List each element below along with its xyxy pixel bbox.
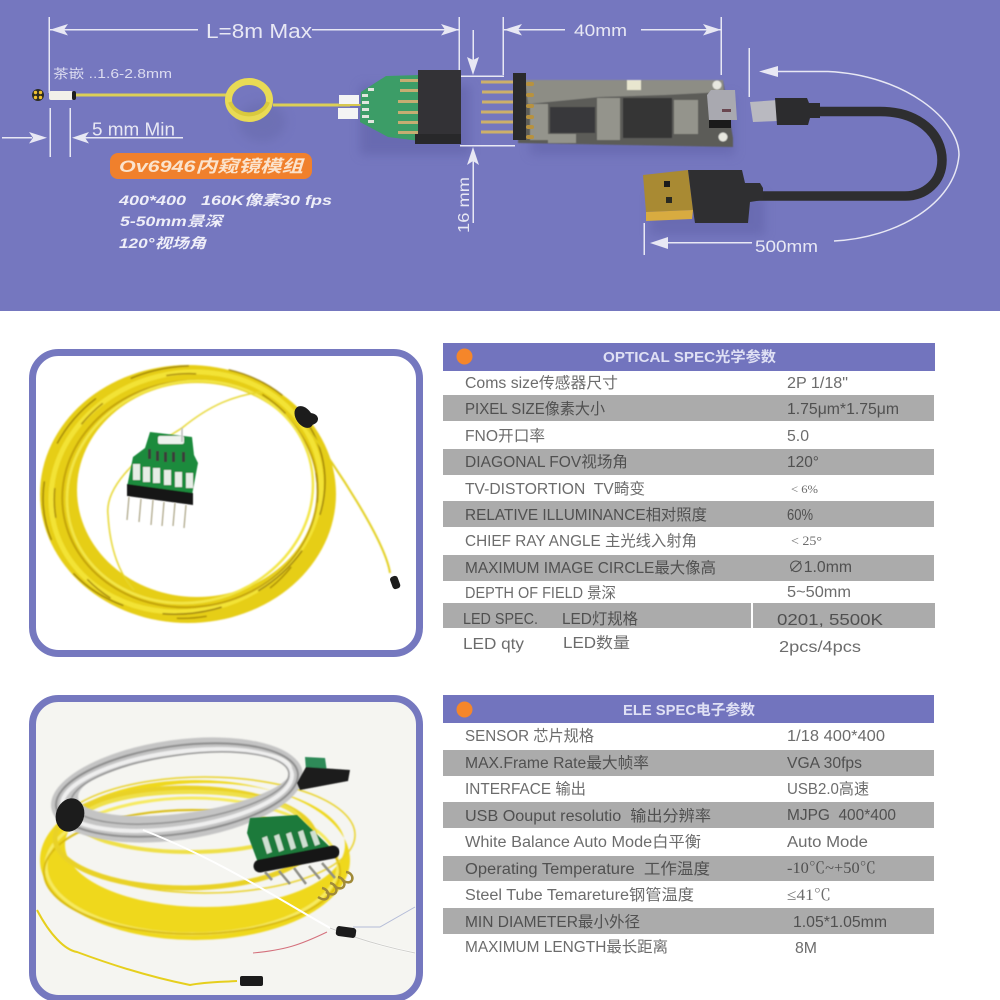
USB board with header pins (481, 73, 737, 155)
silver coil (50, 736, 303, 844)
electrical rows: ≤41℃ (787, 887, 831, 904)
electrical rows: White Balance Auto Mode白平衡 (465, 833, 701, 851)
dimension: 16 mm height (456, 30, 515, 233)
probe diameter label: 茶嵌 ..1.6-2.8mm (53, 66, 172, 81)
badge: module name: Ov6946内窥镜模组 (119, 157, 306, 176)
electrical rows: -10℃~+50℃ (787, 860, 876, 877)
feature list: 120°视场角 (119, 235, 207, 251)
feature list (118, 192, 332, 251)
electrical header: ELE SPEC电子参数 (623, 701, 756, 719)
optical rows: < 25° (791, 533, 822, 548)
electrical rows: Operating Temperature 工作温度 (465, 860, 710, 878)
table: electrical spec (443, 695, 934, 957)
optical rows: LED qty (463, 636, 524, 653)
electrical rows: MIN DIAMETER最小外径 (465, 913, 640, 931)
optical rows: MAXIMUM IMAGE CIRCLE最大像高 (465, 559, 716, 577)
dimension: total length (48, 17, 460, 97)
dimension: 16 mm height: 16 mm (456, 177, 473, 233)
dimension: 500 mm curved: 500mm (755, 237, 818, 256)
optical rows: RELATIVE ILLUMINANCE相对照度 (465, 506, 707, 524)
optical rows: < 6% (791, 482, 818, 496)
optical rows: Coms size传感器尺寸 (465, 374, 618, 392)
feature list: 400*400 160K像素30 fps (118, 192, 332, 208)
sensor breakout PCB and connector (338, 70, 470, 155)
table: optical spec (443, 343, 935, 656)
badge: module name (110, 153, 312, 179)
optical rows (463, 374, 899, 656)
optical rows: LED灯规格 (562, 610, 638, 628)
optical rows: 0201, 5500K (777, 612, 884, 629)
optical header: OPTICAL SPEC光学参数 (603, 348, 777, 366)
optical rows: DEPTH OF FIELD 景深 (465, 584, 616, 602)
optical rows: 2P 1/18" (787, 375, 848, 392)
optical rows: 120° (787, 454, 819, 471)
feature list: 5-50mm景深 (120, 213, 225, 229)
electrical rows: MAX.Frame Rate最大帧率 (465, 754, 649, 772)
electrical rows: USB2.0高速 (787, 780, 869, 798)
optical rows: CHIEF RAY ANGLE 主光线入射角 (465, 532, 697, 550)
electrical rows: VGA 30fps (787, 755, 862, 772)
dimension: 5 mm min (2, 108, 183, 157)
optical rows: 60% (787, 507, 813, 524)
optical rows: 2pcs/4pcs (779, 639, 861, 656)
wire tie (294, 406, 318, 428)
optical rows: ∅1.0mm (788, 559, 852, 576)
electrical rows: USB Oouput resolutio 输出分辨率 (465, 807, 711, 825)
optical rows: TV-DISTORTION TV畸变 (465, 480, 645, 498)
electrical rows: SENSOR 芯片规格 (465, 727, 594, 745)
optical rows: 1.75μm*1.75μm (787, 401, 899, 418)
optical header (443, 343, 935, 371)
electrical rows: 1.05*1.05mm (793, 914, 887, 931)
optical rows: DIAGONAL FOV视场角 (465, 453, 628, 471)
thin wires and tips (37, 830, 415, 985)
yellow coil (40, 777, 355, 940)
panel: silver and yellow cables photo (32, 698, 420, 998)
electrical rows (465, 727, 896, 957)
wire tie (56, 798, 84, 832)
yellow wire coil (38, 364, 392, 624)
optical rows: LED SPEC. (463, 611, 538, 628)
far connector (297, 757, 350, 790)
electrical rows: INTERFACE 输出 (465, 780, 586, 798)
hero banner (0, 0, 1000, 311)
electrical rows: Auto Mode (787, 834, 868, 851)
electrical rows: 8M (795, 940, 817, 957)
green breakout board (127, 428, 198, 528)
electrical rows: 1/18 400*400 (787, 728, 885, 745)
optical rows: FNO开口率 (465, 427, 545, 445)
electrical header (443, 695, 934, 723)
USB cable with type-C and type-A plugs (643, 98, 942, 235)
icon: camera lens front (32, 89, 44, 101)
electrical rows: Steel Tube Temareture钢管温度 (465, 886, 694, 904)
optical rows: LED数量 (563, 634, 630, 652)
dimension: 40 mm (502, 17, 722, 75)
wire tip (390, 576, 400, 590)
optical rows: 5.0 (787, 428, 809, 445)
dimension: 5 mm min: 5 mm Min (92, 120, 175, 140)
optical rows: PIXEL SIZE像素大小 (465, 400, 605, 418)
optical rows: 5~50mm (787, 584, 851, 601)
electrical rows: MAXIMUM LENGTH最长距离 (465, 938, 668, 956)
dimension: 40 mm: 40mm (574, 21, 627, 40)
dimension: 500 mm curved (644, 48, 959, 256)
electrical rows: MJPG 400*400 (787, 807, 896, 824)
spring wrap (318, 872, 352, 899)
green breakout board (247, 815, 335, 884)
camera probe and yellow wire (49, 82, 350, 142)
panel: coiled yellow cable photo (16, 336, 420, 654)
dimension: total length: L=8m Max (206, 20, 313, 43)
